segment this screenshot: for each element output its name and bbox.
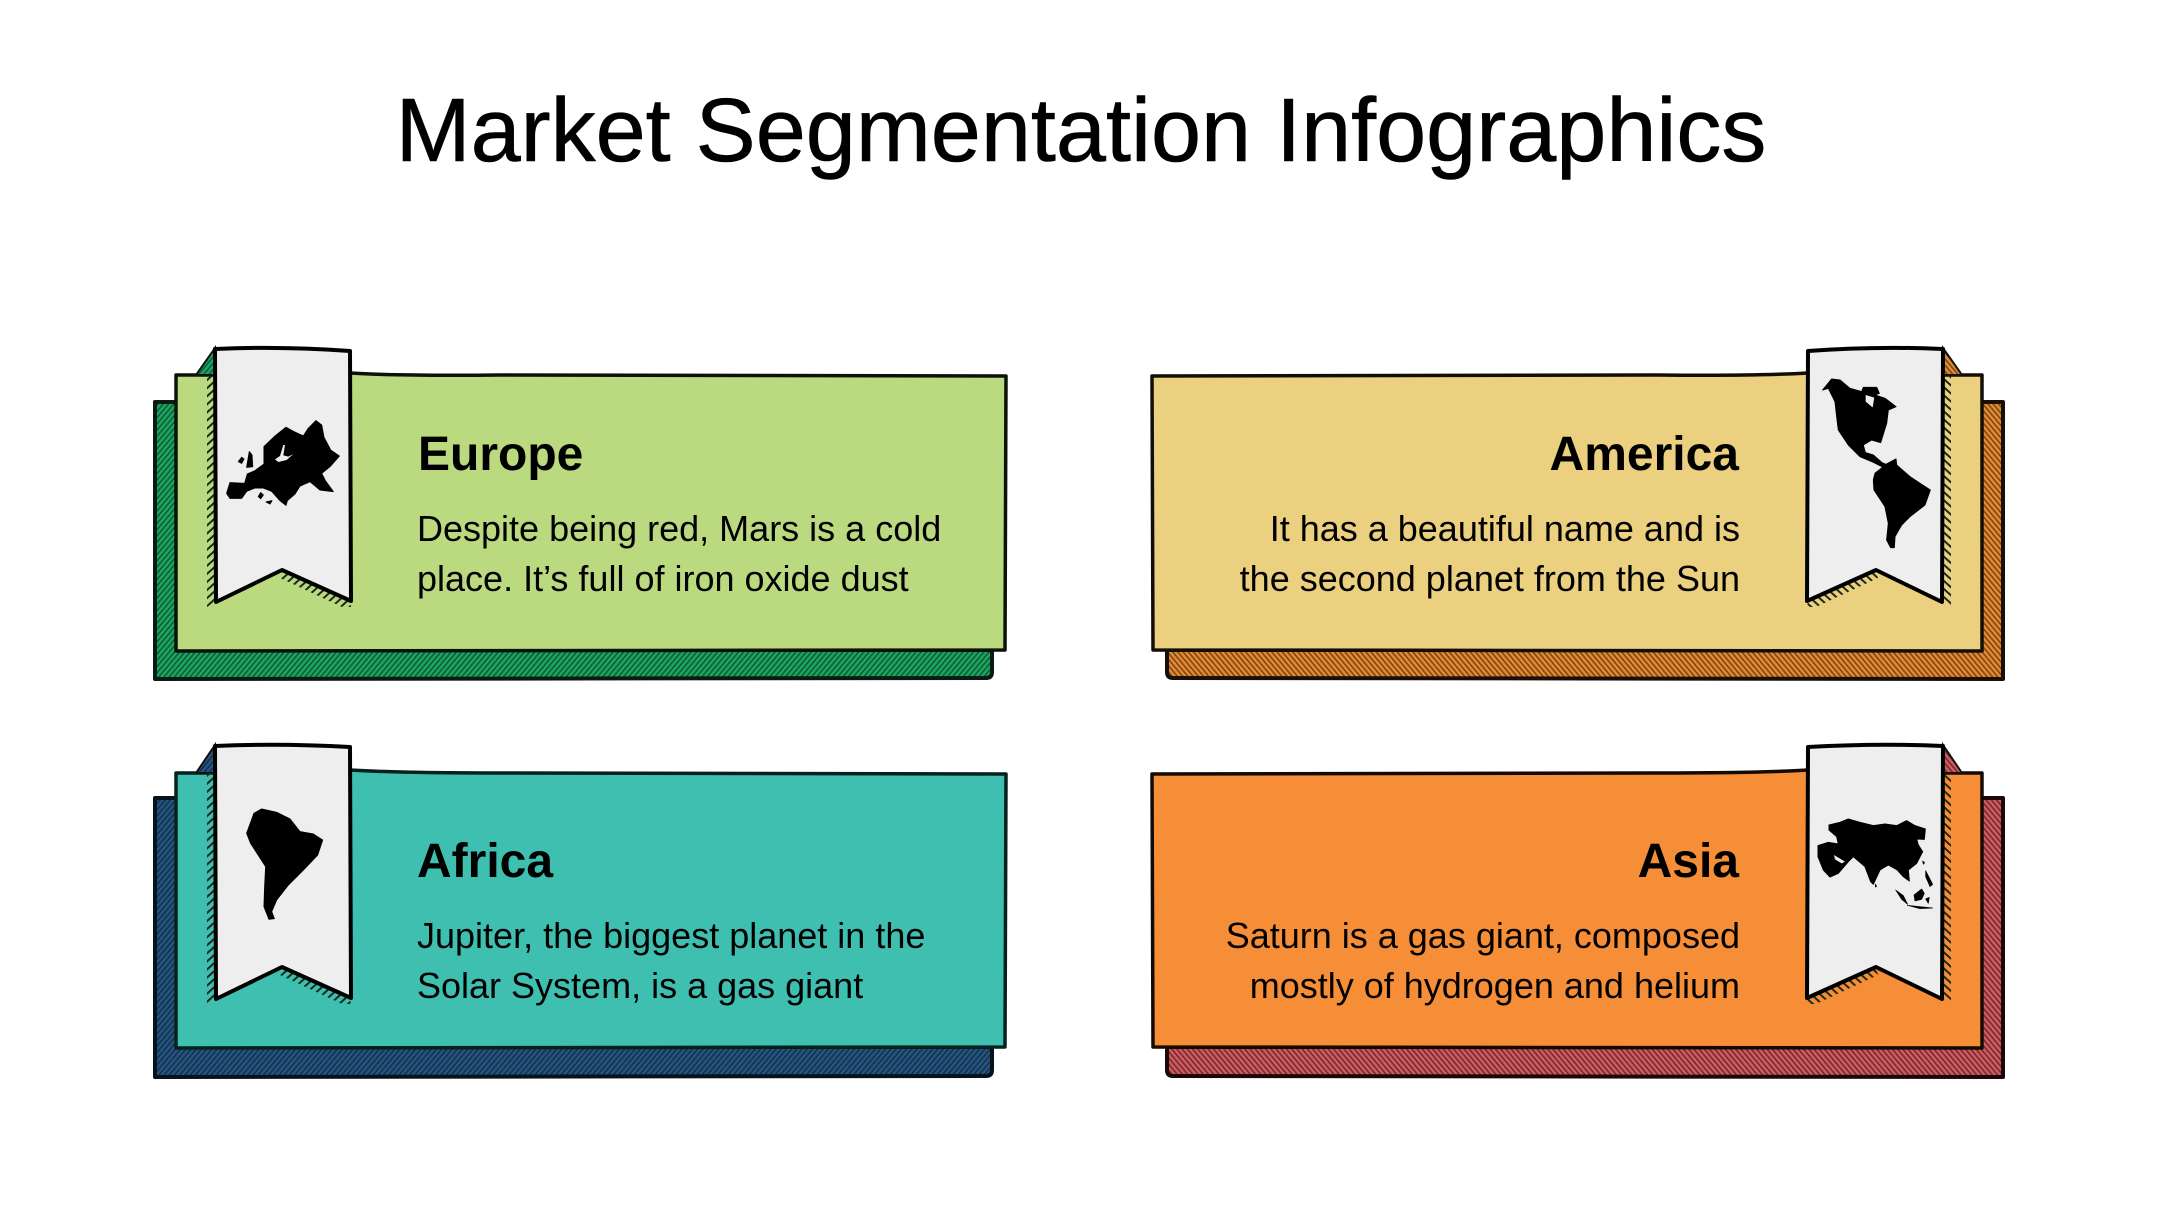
ribbon bbox=[1807, 348, 1943, 602]
ribbon bbox=[215, 348, 351, 602]
ribbon fold bbox=[1943, 348, 1962, 375]
text: Asia body: Saturn is a gas giant, composed bbox=[1226, 915, 1740, 956]
back sheet bbox=[1167, 402, 2003, 679]
ribbon hatching bbox=[1807, 376, 1951, 607]
panel: Africa bbox=[155, 745, 1006, 1077]
ribbon hatching bbox=[1807, 773, 1951, 1004]
ribbon hatching bbox=[207, 773, 351, 1004]
icon: Americas map bbox=[1823, 379, 1930, 548]
text: Europe body: Despite being red, Mars is a cold bbox=[417, 508, 941, 549]
panel: Asia bbox=[1152, 745, 2003, 1077]
title: Market Segmentation Infographics bbox=[396, 81, 1766, 181]
text: Asia heading: Asia bbox=[1638, 835, 1739, 888]
front sheet bbox=[1152, 373, 1982, 651]
ribbon hatching bbox=[207, 376, 351, 607]
icon: South America map bbox=[247, 809, 323, 919]
text: Europe body: place. It’s full of iron oxide dust bbox=[417, 558, 909, 599]
back sheet bbox=[155, 798, 992, 1077]
front sheet bbox=[176, 770, 1006, 1048]
text: America heading: America bbox=[1550, 428, 1739, 481]
text: America body: It has a beautiful name and is bbox=[1270, 508, 1740, 549]
ribbon bbox=[215, 745, 351, 999]
back sheet bbox=[155, 402, 992, 679]
ribbon fold bbox=[196, 348, 215, 375]
text: Africa heading: Africa bbox=[417, 835, 553, 888]
panel: Europe bbox=[155, 348, 1006, 679]
front sheet bbox=[176, 373, 1006, 651]
text: America body: the second planet from the Sun bbox=[1240, 558, 1740, 599]
panel: America bbox=[1152, 348, 2003, 679]
ribbon bbox=[1807, 745, 1943, 999]
ribbon fold bbox=[196, 745, 215, 773]
ribbon fold bbox=[1943, 745, 1962, 773]
text: Africa body: Solar System, is a gas giant bbox=[417, 965, 863, 1006]
back sheet bbox=[1167, 798, 2003, 1077]
text: Europe heading: Europe bbox=[418, 428, 583, 481]
front sheet bbox=[1152, 770, 1982, 1048]
icon: Europe map bbox=[227, 421, 339, 505]
text: Africa body: Jupiter, the biggest planet in the bbox=[417, 915, 925, 956]
icon: Asia map bbox=[1818, 819, 1933, 909]
text: Asia body: mostly of hydrogen and helium bbox=[1250, 965, 1740, 1006]
